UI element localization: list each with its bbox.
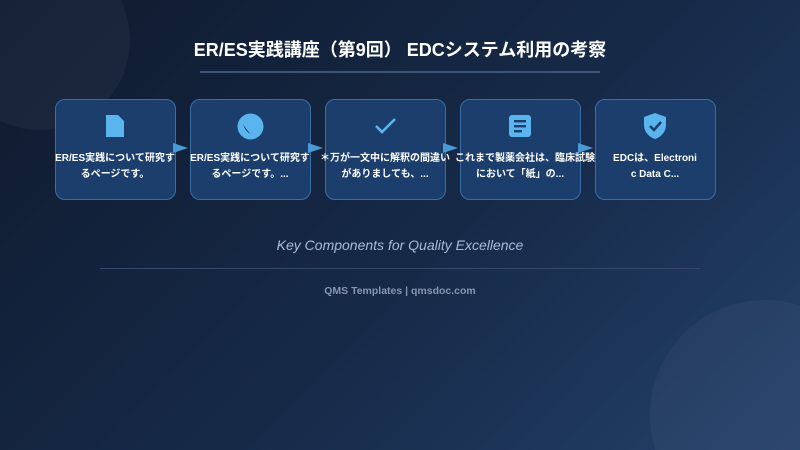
text 3: がありましても、... [341,169,429,180]
title: ER/ES実践講座（第9回） EDCシステム利用の考察 [194,40,606,60]
footer: QMS Templates | qmsdoc.com [324,285,476,297]
icon: check [375,118,396,134]
arrow 2 [308,143,323,153]
arrow 4 [578,143,593,153]
text 3 [320,152,450,180]
step 4 [460,99,581,200]
icon: shield [644,113,666,139]
text 5: c Data C... [631,169,679,180]
text 4: これまで製薬会社は、臨床試験 [455,153,595,164]
step 2 [190,99,311,200]
text 4: において「紙」の... [476,169,564,180]
icon: list doc [509,115,531,137]
step 3 [325,99,446,200]
text 1 [55,152,175,180]
text 1: るページです。 [81,169,149,180]
icon: circle [238,114,264,140]
text 2: ER/ES実践について研究す [190,153,310,164]
text 5 [613,152,697,180]
subtitle: Key Components for Quality Excellence [277,237,523,253]
arrow 1 [173,143,188,153]
text 2: るページです。... [211,169,289,180]
step 5 [595,99,716,200]
icon: document [106,115,124,137]
text 2 [190,152,310,180]
text 5: EDCは、Electroni [613,153,697,164]
step 1 [55,99,176,200]
text 1: ER/ES実践について研究す [55,153,175,164]
text 4 [455,152,595,180]
text 3: ＊万が一文中に解釈の間違い [320,153,450,164]
arrow 3 [443,143,458,153]
